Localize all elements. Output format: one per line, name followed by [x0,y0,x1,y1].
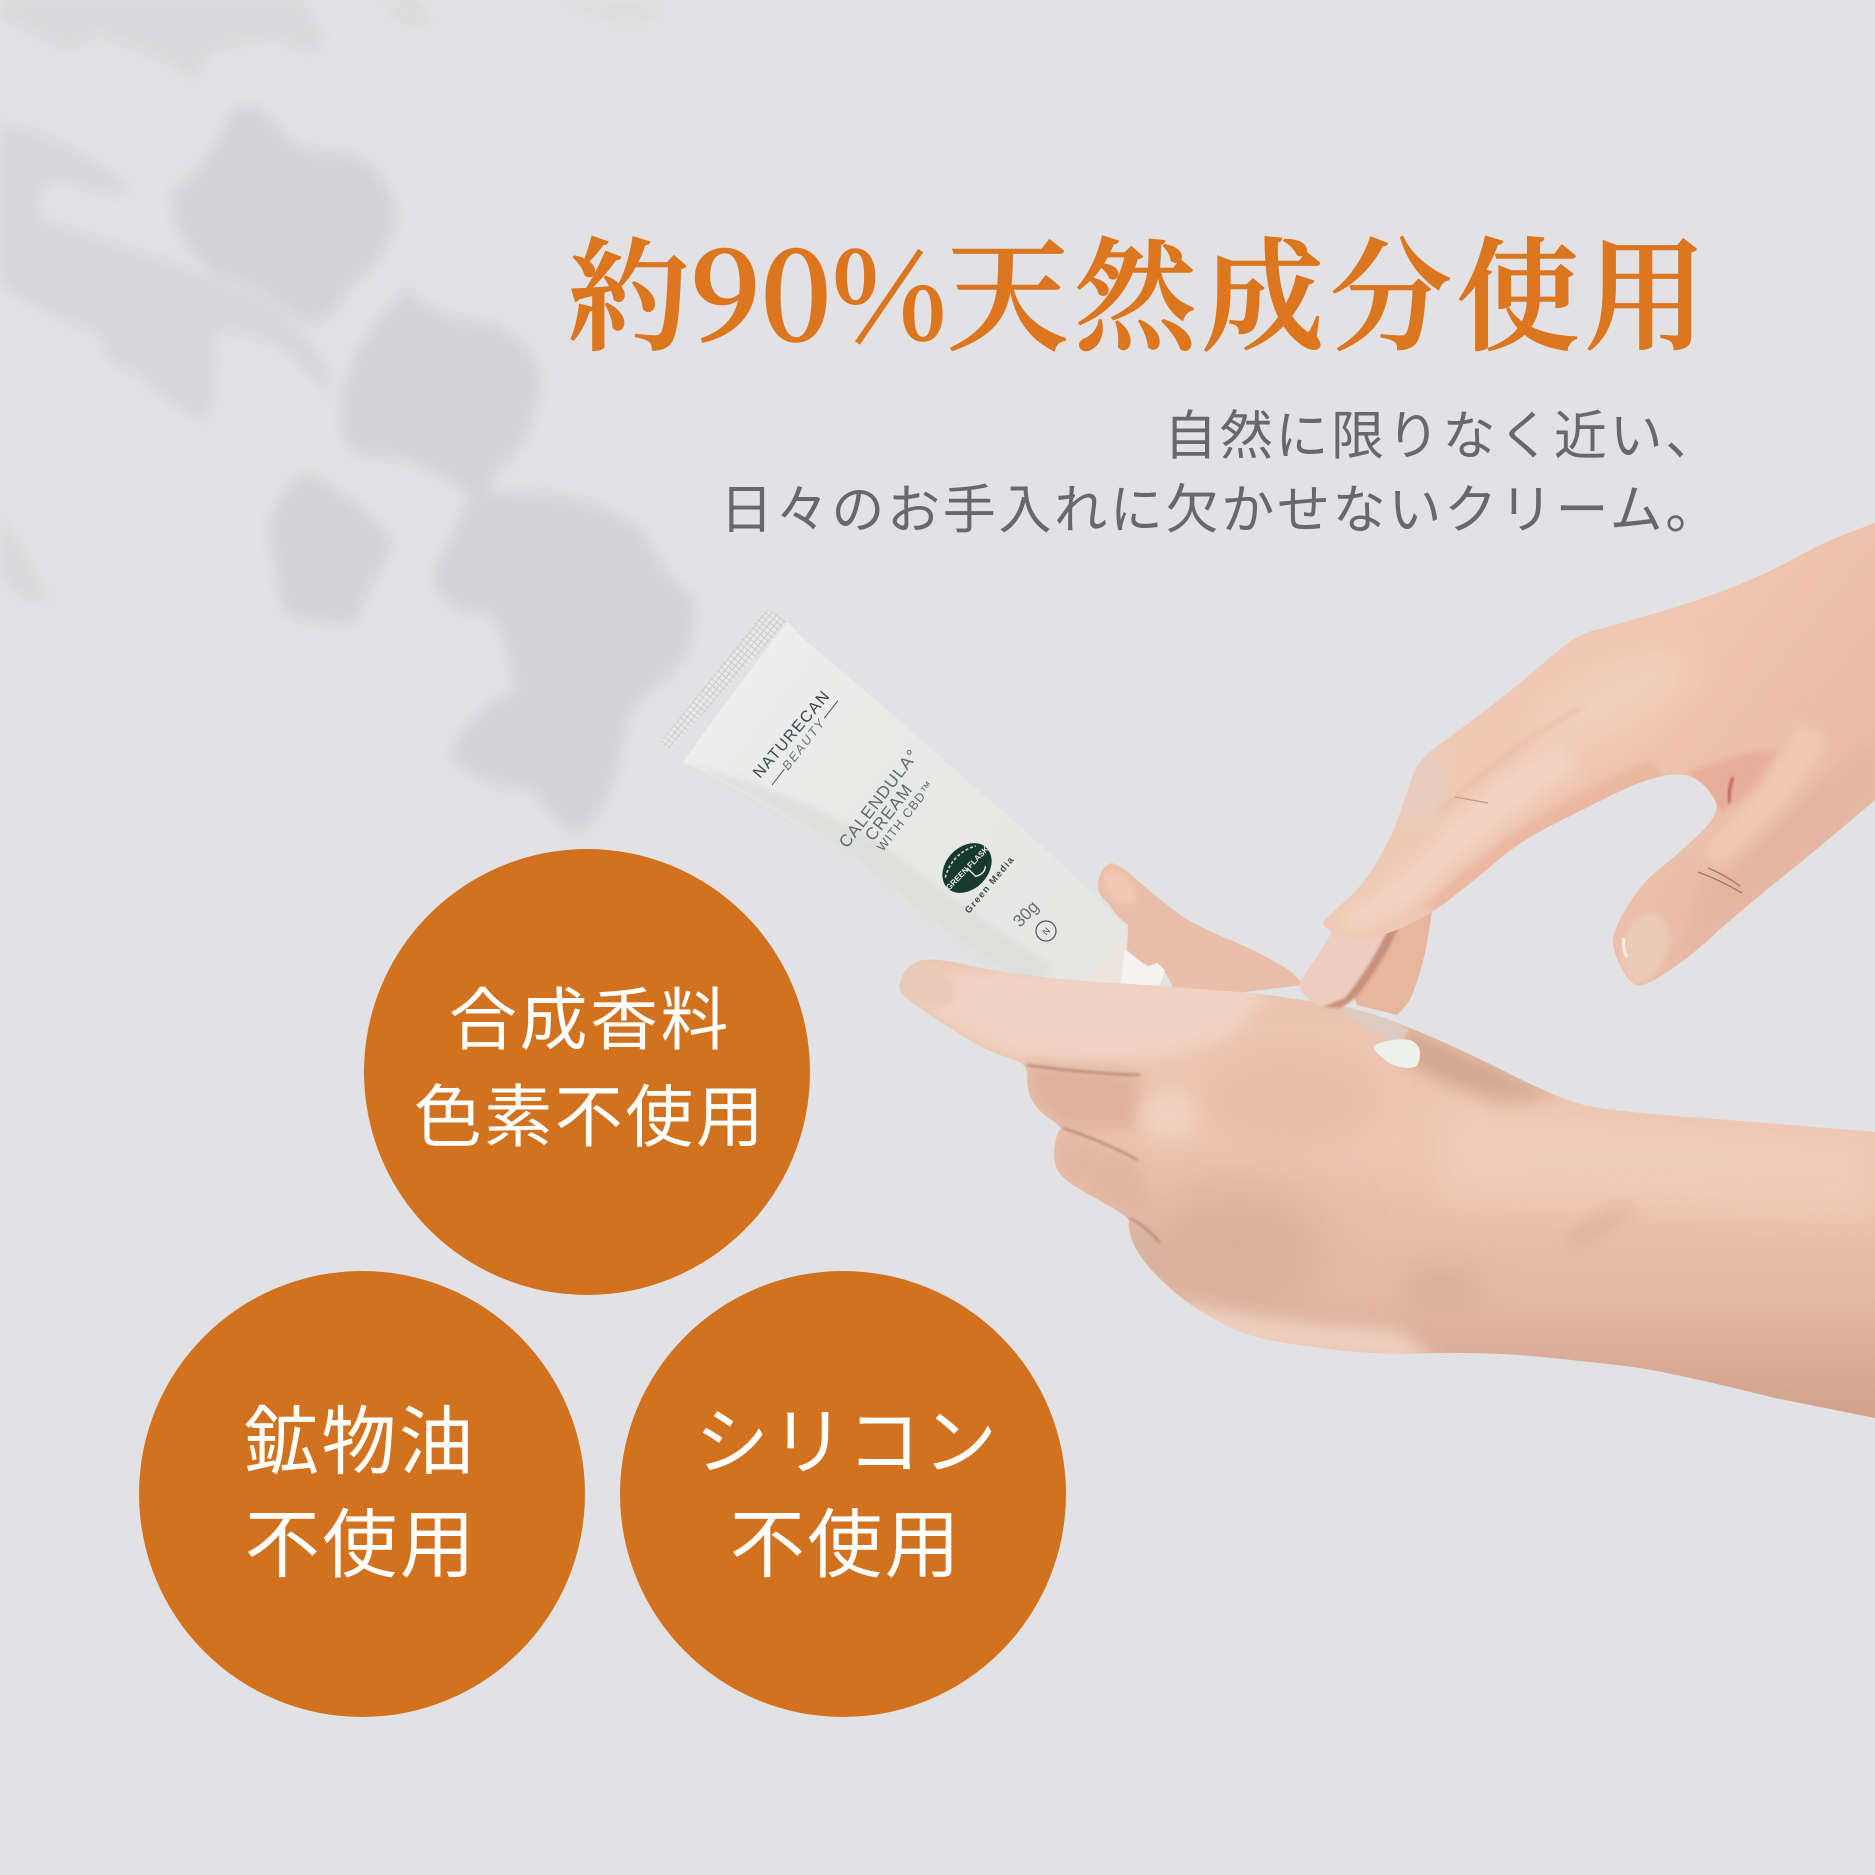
thumb tip tone [900,978,954,1006]
subtitle line 1: 自然に限りなく近い、 [1164,394,1721,470]
knuckle tone [1406,762,1444,821]
badge text line 2: 不使用 [730,1484,962,1593]
tube body [683,622,1127,990]
badge text line 1: 鉱物油 [244,1381,476,1490]
title: 約90%天然成分使用 [568,200,1712,375]
badge text line 2: 不使用 [245,1484,477,1593]
top edge dark band [1404,1026,1552,1108]
green media label: Green Media [963,854,1017,916]
opening white fold [1120,950,1165,985]
badge: fragrance and colorant free [364,849,810,1295]
fingertip tint [1098,865,1142,911]
upper hand [1323,523,1875,989]
brand name: NATURECAN [750,688,834,782]
N mark [1036,921,1056,941]
back of hand shadow [1154,1177,1318,1297]
tube opening [1087,930,1165,987]
leaf shadows [0,0,694,833]
product tube [660,608,1165,990]
badge: silicone free [620,1271,1066,1717]
lower hand and forearm [888,953,1875,1418]
palm highlight [1554,658,1678,738]
pressing finger shade [1322,925,1400,1008]
weight label: 30g [1009,897,1043,931]
knuckle highlight [1141,1092,1196,1137]
back finger of upper hand [1340,905,1433,1015]
wrist vein shadows [1418,1271,1466,1300]
badge text line 2: 色素不使用 [414,1062,766,1161]
product name line 3: WITH CBD™ [874,778,937,854]
thumb nail [1622,914,1668,982]
back of hand centre tone [1246,1086,1334,1114]
thenar web [1690,750,1776,812]
thumb highlight [900,969,1270,1064]
palm edge highlight [1187,1299,1433,1354]
brand rules and sub label: BEAUTY [779,715,829,773]
cream dab [1373,1039,1420,1068]
finger separation [1438,707,1582,813]
thumb shade [1680,740,1875,960]
finger creases [1027,1065,1160,1243]
thumb upper highlight [1712,733,1820,863]
second finger tone [1027,1062,1140,1130]
cream sheen [1344,1007,1408,1040]
subtitle line 2: 日々のお手入れに欠かせないクリーム。 [720,468,1721,544]
green flask badge [932,833,1002,903]
index underside shade [1425,760,1665,915]
product name: CALENDULA° [835,746,923,851]
pressing finger [1300,925,1400,1008]
product name line 2: CREAM [861,780,917,844]
badge text line 1: シリコン [695,1383,999,1490]
tube shadow side [683,762,1050,990]
web crease [1729,777,1733,803]
brand rules and sub label [766,696,843,789]
tube crimp [660,608,787,750]
third finger tone [1054,1136,1142,1206]
thumb knuckle creases [1698,868,1742,893]
green flask badge: GREEN FLASK [944,844,991,892]
nail tip [1623,938,1627,957]
index finger highlight [1344,749,1575,930]
fourth finger tone [1129,1229,1152,1270]
wrist bright band [1461,1094,1861,1210]
N mark: N [1041,926,1052,937]
subtitle [720,394,1721,544]
raised finger behind tube [1098,863,1303,1000]
badge: mineral oil free [139,1271,585,1717]
knuckle crease [1455,797,1488,803]
badge text line 1: 合成香料 [449,965,731,1064]
